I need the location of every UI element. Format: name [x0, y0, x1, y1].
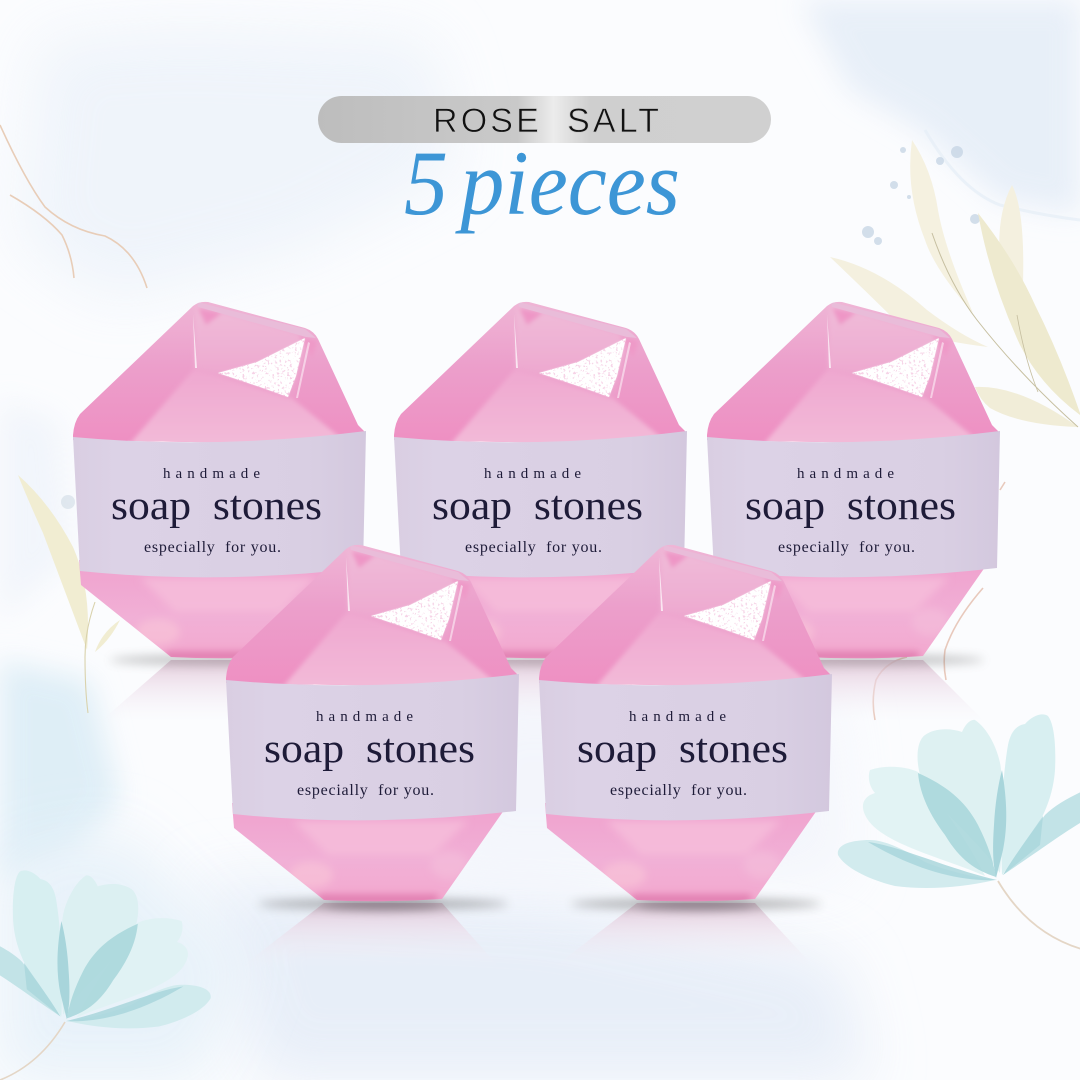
- soap: back centre: [394, 302, 687, 660]
- soap: front left: soap stones: [264, 725, 475, 771]
- soap: front right: especially for you.: [610, 782, 747, 799]
- heading: 5 pieces: 5 pieces: [404, 132, 680, 234]
- soap: back right: especially for you.: [778, 539, 915, 556]
- soap: back right: [707, 302, 1000, 660]
- soap: back centre: handmade: [484, 466, 581, 482]
- banner: rose salt: ROSE SALT: [433, 102, 659, 140]
- soap: front left: [226, 545, 519, 903]
- soap: back left: especially for you.: [144, 539, 281, 556]
- flower bottom right: [838, 714, 1080, 950]
- reflections and shadows: [100, 655, 985, 968]
- decorative leaves left: [18, 475, 120, 713]
- decorative twigs top left: [0, 125, 147, 288]
- soap: back centre: especially for you.: [465, 539, 602, 556]
- soap: front right: soap stones: [577, 725, 788, 771]
- soap: back left: handmade: [163, 466, 260, 482]
- soap: back centre: soap stones: [432, 482, 643, 528]
- flower bottom left: [0, 870, 211, 1080]
- soap: back left: [73, 302, 366, 660]
- soap: back left: soap stones: [111, 482, 322, 528]
- soap: back right: soap stones: [745, 482, 956, 528]
- soap: front right: [539, 545, 832, 903]
- decorative leaves right: [830, 140, 1080, 427]
- soap: front left: especially for you.: [297, 782, 434, 799]
- soap: front left: handmade: [316, 709, 413, 725]
- decorative twig right: [873, 482, 1005, 720]
- banner: rose salt: [318, 96, 771, 143]
- soap: back right: handmade: [797, 466, 894, 482]
- soap: front right: handmade: [629, 709, 726, 725]
